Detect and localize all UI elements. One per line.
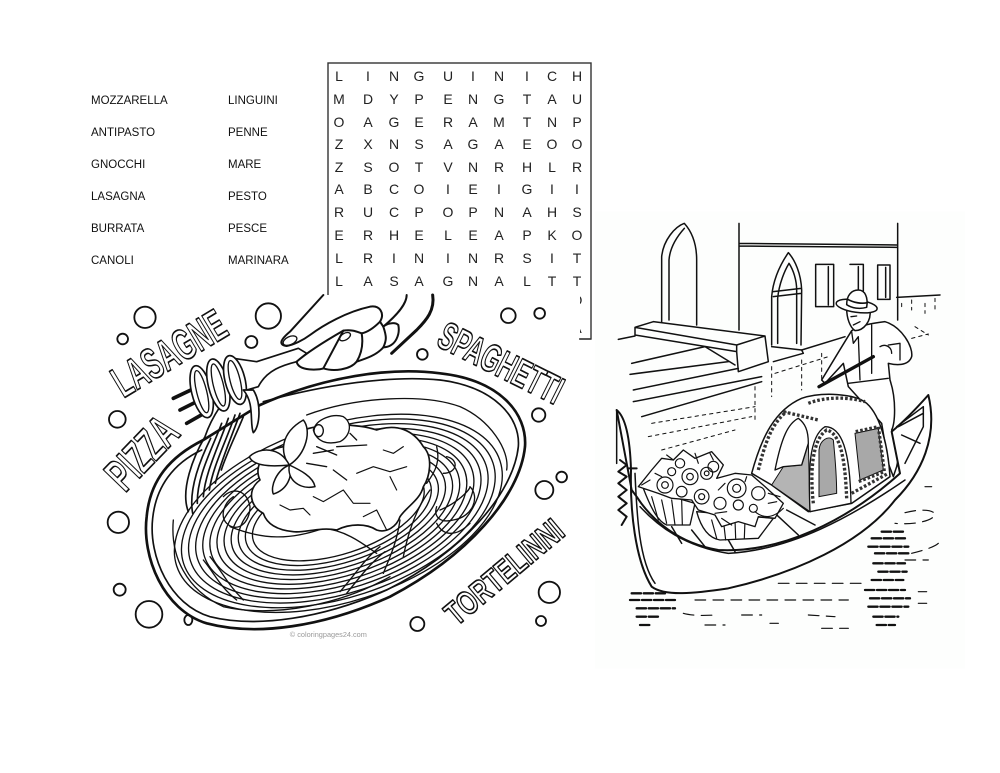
lettering: tortelinni: TORTELINNI bbox=[438, 512, 572, 633]
word list: LINGUINI bbox=[228, 95, 278, 107]
water reflections bbox=[630, 487, 938, 628]
word search grid bbox=[328, 63, 591, 339]
word list: ANTIPASTO bbox=[91, 127, 155, 139]
word search grid: ZSOTVNRHLR bbox=[335, 159, 582, 175]
word search grid: A bbox=[572, 320, 582, 336]
word search grid: OAGERAMTNP bbox=[334, 114, 582, 130]
gondola hull bbox=[617, 395, 931, 593]
sauce ripples bbox=[280, 447, 407, 530]
word search grid: O bbox=[572, 292, 583, 308]
word list: MOZZARELLA bbox=[91, 95, 168, 107]
crossing strands bbox=[203, 447, 475, 600]
word list: BURRATA bbox=[91, 223, 145, 235]
quay steps bbox=[618, 322, 768, 417]
word list: CANOLI bbox=[91, 255, 134, 267]
word search grid: LINGUINICH bbox=[335, 68, 582, 84]
word search grid: MDYPENGTAU bbox=[333, 91, 582, 107]
fork with twirled spaghetti bbox=[173, 348, 307, 513]
flower baskets bbox=[638, 450, 783, 540]
watermark: © coloringpages24.com bbox=[290, 630, 367, 639]
ferro ornament bbox=[618, 460, 637, 525]
word list: MARINARA bbox=[228, 255, 289, 267]
word search grid: ERHELEAPKO bbox=[334, 227, 583, 243]
word list: LASAGNA bbox=[91, 191, 146, 203]
word list: PESCE bbox=[228, 223, 267, 235]
gondolier bbox=[819, 290, 912, 477]
plate bbox=[146, 371, 525, 629]
word search grid: ZXNSAGAEOO bbox=[335, 136, 583, 152]
word list bbox=[91, 95, 289, 267]
word search grid: ABCOIEIGII bbox=[334, 181, 579, 197]
decorative bubbles bbox=[108, 303, 567, 631]
word list: GNOCCHI bbox=[91, 159, 145, 171]
hand bbox=[281, 295, 433, 370]
felze cabin bbox=[752, 394, 890, 512]
word list: MARE bbox=[228, 159, 262, 171]
word search grid: LASAGNALTT bbox=[335, 273, 582, 289]
meatball and basil bbox=[249, 416, 367, 494]
lettering: pizza: PIZZA bbox=[95, 405, 189, 500]
gondola illustration bbox=[595, 212, 965, 668]
word search grid: RUCPOPNAHS bbox=[334, 204, 582, 220]
buildings and windows bbox=[662, 223, 940, 362]
grid corner remnant bbox=[579, 338, 591, 340]
spaghetti nest bbox=[149, 377, 527, 650]
word list: PENNE bbox=[228, 127, 268, 139]
canal reflections upper bbox=[648, 298, 935, 450]
lettering: spaghetti: SPAGHETTI bbox=[431, 314, 570, 413]
pasta illustration bbox=[95, 295, 580, 650]
sauce bbox=[252, 425, 430, 532]
word search grid: LRININRSIT bbox=[335, 250, 582, 266]
lettering: lasagne: LASAGNE bbox=[103, 301, 236, 407]
word list: PESTO bbox=[228, 191, 267, 203]
